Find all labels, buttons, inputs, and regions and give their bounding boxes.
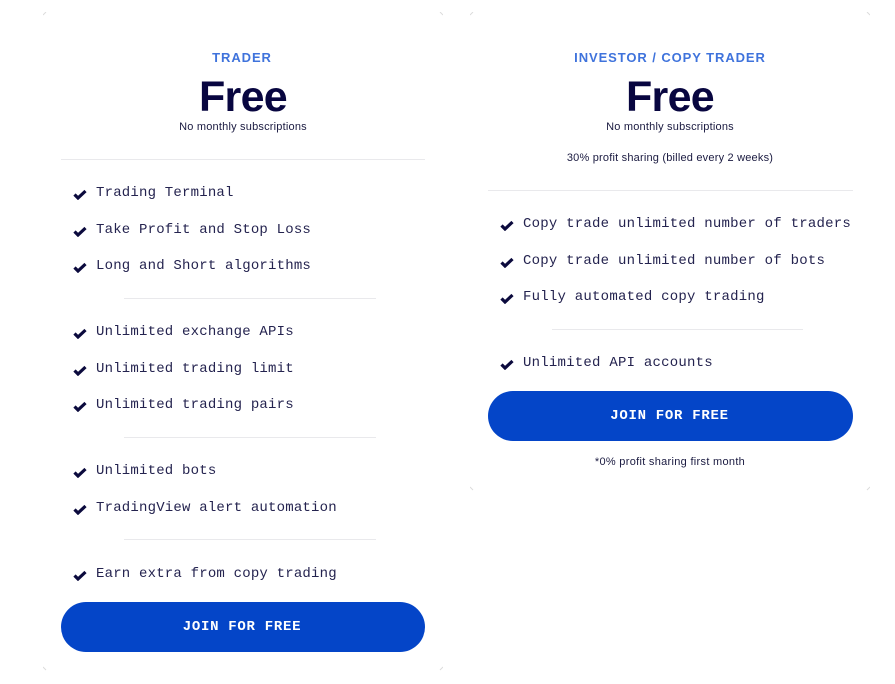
divider: [61, 159, 425, 160]
feature: Earn extra from copy trading: [96, 566, 337, 582]
feature: TradingView alert automation: [96, 500, 337, 516]
corner marks: [470, 12, 870, 490]
subtext: no monthly subscriptions: No monthly subscriptions: [606, 121, 734, 133]
feature: Take Profit and Stop Loss: [96, 222, 311, 238]
feature: Unlimited trading limit: [96, 361, 294, 377]
price: free: Free: [626, 73, 714, 121]
feature list: trader: [73, 185, 337, 582]
button: join for free: JOIN FOR FREE: [610, 408, 729, 424]
price: free: Free: [199, 73, 287, 121]
subtext: profit sharing: 30% profit sharing (billed every 2 weeks): [567, 152, 773, 164]
feature: Long and Short algorithms: [96, 258, 311, 274]
button: join for free: [61, 602, 425, 652]
feature: Unlimited exchange APIs: [96, 324, 294, 340]
heading: trader: TRADER: [212, 50, 272, 65]
feature: Trading Terminal: [96, 185, 234, 201]
corner marks: [43, 12, 443, 670]
button: join for free: [488, 391, 853, 441]
footnote: *0% profit sharing first month: [595, 456, 745, 468]
feature: Unlimited API accounts: [523, 355, 713, 371]
feature: Unlimited bots: [96, 463, 216, 479]
feature list: investor: [500, 216, 851, 371]
heading: investor / copy trader: INVESTOR / COPY TRADER: [574, 50, 766, 65]
panel: trader: [43, 12, 443, 670]
feature: Copy trade unlimited number of bots: [523, 253, 825, 269]
subtext: no monthly subscriptions: No monthly subscriptions: [179, 121, 307, 133]
panel: investor / copy trader: [470, 12, 870, 490]
divider: [488, 190, 853, 191]
feature: Copy trade unlimited number of traders: [523, 216, 851, 232]
feature: Fully automated copy trading: [523, 289, 765, 305]
button: join for free: JOIN FOR FREE: [183, 619, 301, 635]
feature: Unlimited trading pairs: [96, 397, 294, 413]
